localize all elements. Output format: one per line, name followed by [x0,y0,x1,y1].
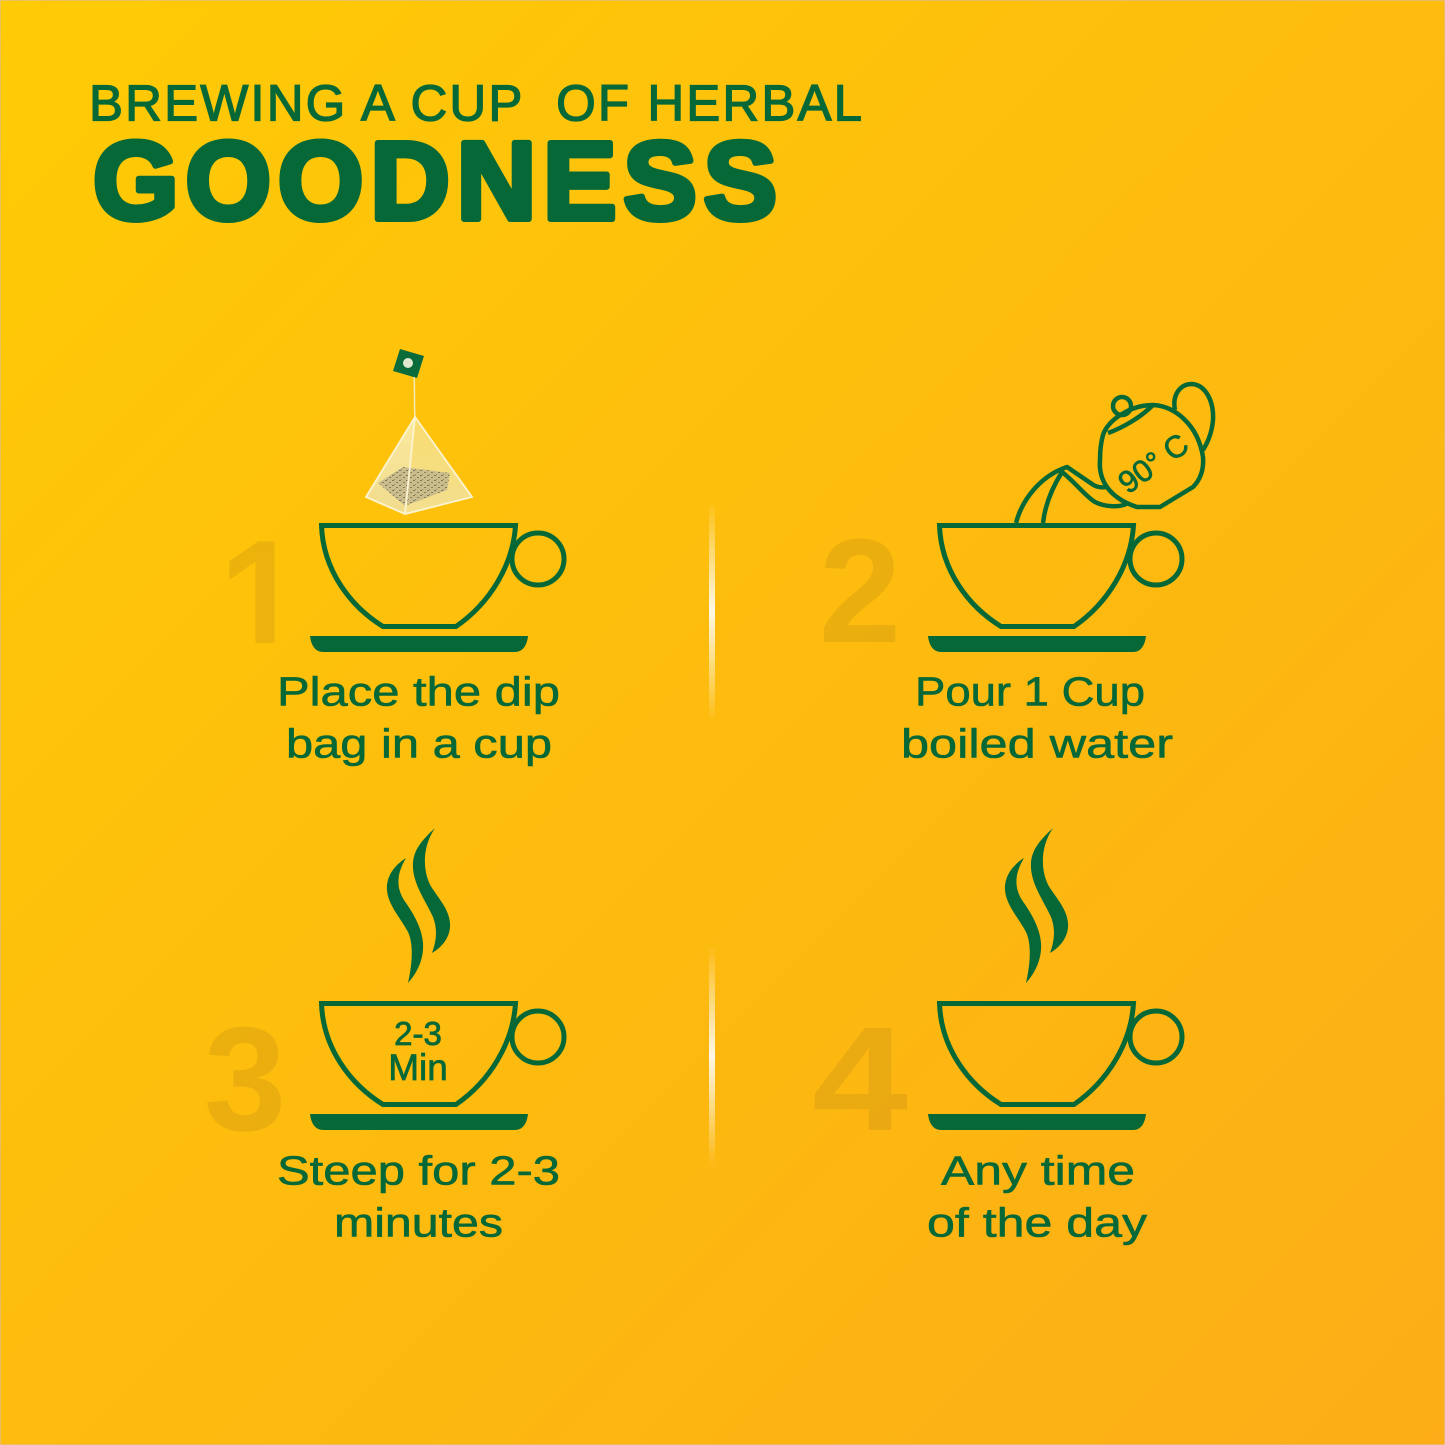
label [277,1148,560,1246]
number 1: 1 [215,507,309,695]
cup text: 2-3 [394,1015,442,1052]
number 4: 4 [812,997,908,1162]
label: minutes [334,1200,503,1246]
divider bottom [709,945,715,1167]
panel: step 1 [215,349,564,766]
cup text [388,1015,448,1088]
number 3: 3 [204,997,286,1162]
icon: cup [928,526,1182,652]
icon: cup [310,526,564,652]
label: bag in a cup [286,720,552,766]
number 2: 2 [819,509,901,674]
label: Place the dip [277,668,560,714]
panel: step 3 [204,828,564,1246]
icon: teapot [1016,384,1213,523]
icon: steam [387,828,450,983]
label [277,668,560,766]
panel: step 2 [819,384,1213,766]
divider top [709,500,715,722]
icon: cup [310,1004,564,1130]
label: Any time [941,1148,1135,1194]
icon: steam [1005,828,1068,983]
label: of the day [927,1200,1148,1246]
label: boiled water [901,720,1173,766]
title line: goodness: GOODNESS [93,120,777,243]
cup text: Min [388,1047,448,1088]
title line: brewing a cup of herbal: BREWING A CUP OF HERBAL [89,74,862,132]
label: Pour 1 Cup [915,668,1145,714]
label: Steep for 2-3 [277,1148,560,1194]
teapot temperature: 90° C [1112,426,1195,500]
label [927,1148,1148,1246]
icon: tea bag [366,349,472,514]
icon: cup [928,1004,1182,1130]
title [89,74,862,243]
label [901,668,1173,766]
panel: step 4 [812,828,1182,1246]
